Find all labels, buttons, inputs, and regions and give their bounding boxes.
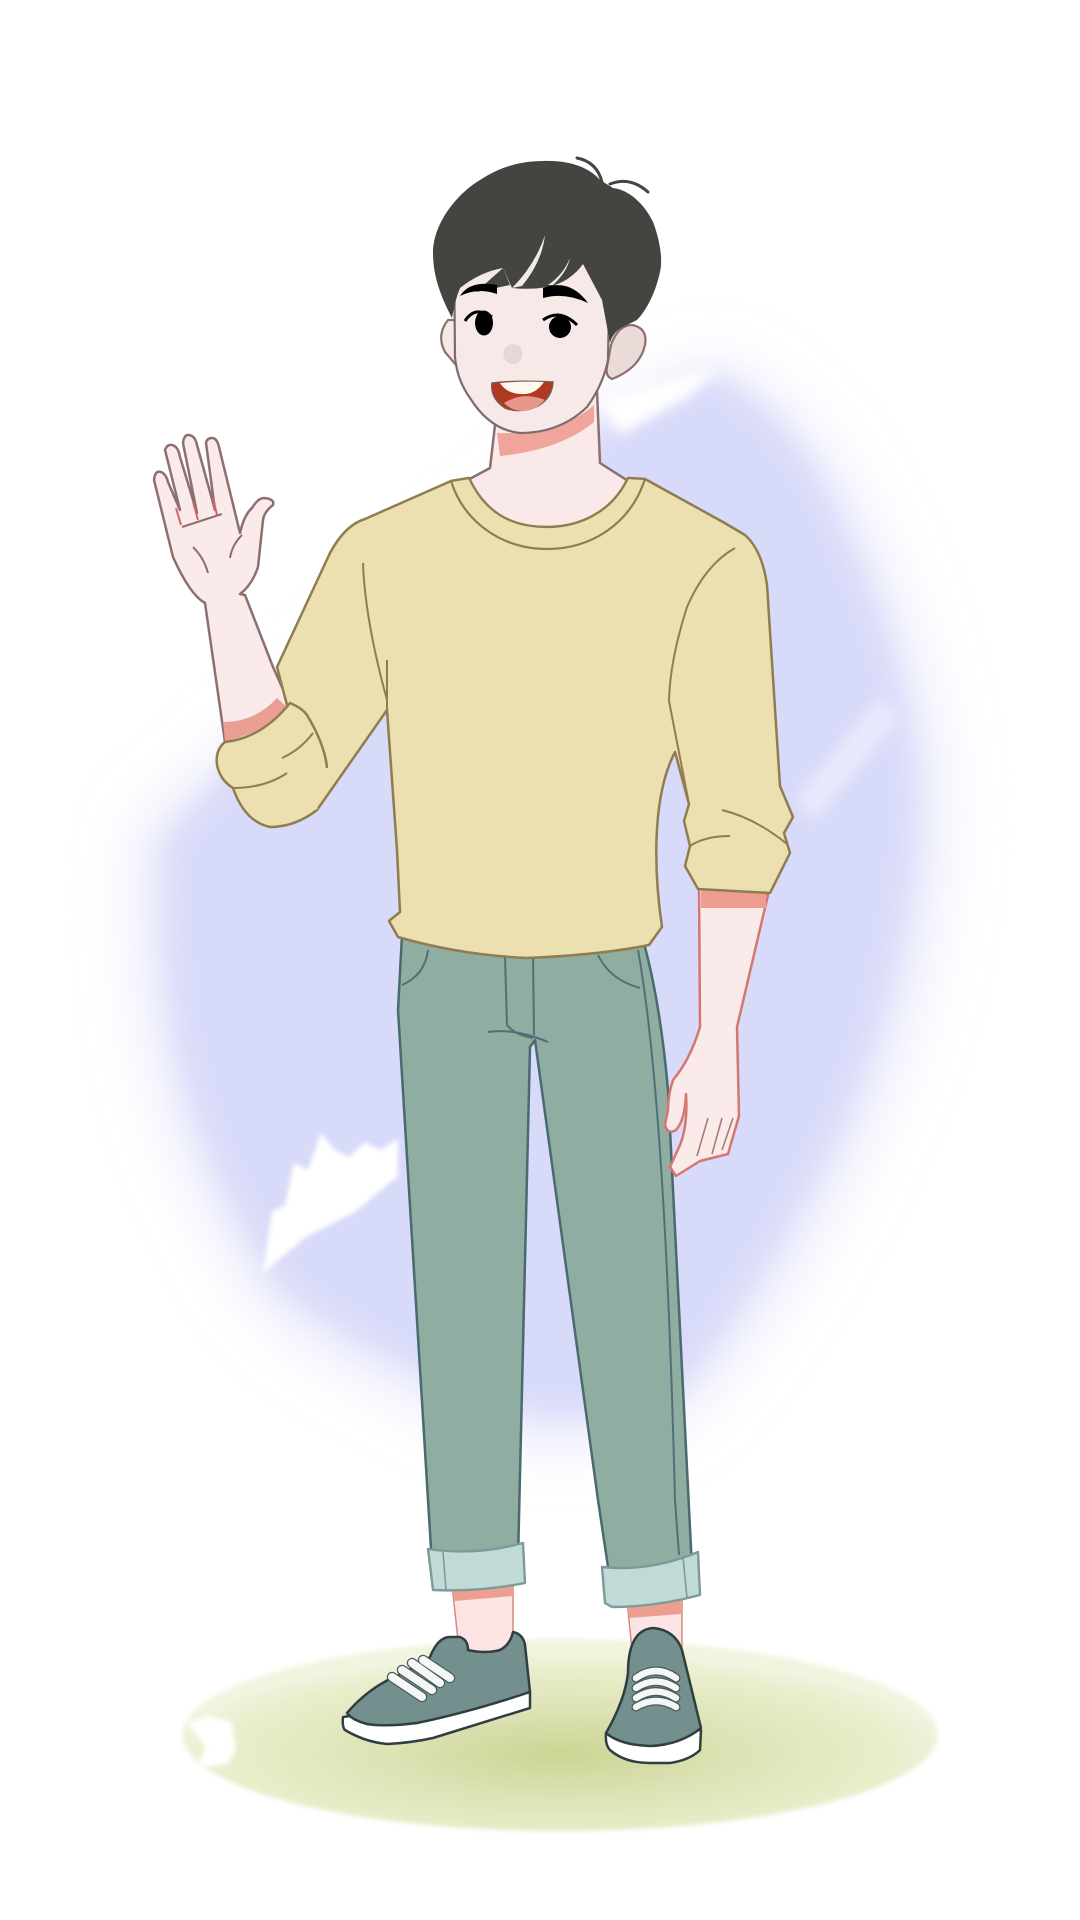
left eyebrow (460, 284, 497, 296)
left eye (475, 310, 493, 336)
trouser seams and pockets (402, 950, 679, 1555)
face (454, 250, 610, 433)
right eye (549, 316, 571, 338)
right ankle (627, 1598, 682, 1650)
wrist shadow (701, 888, 766, 908)
left ear (441, 320, 456, 365)
right eyebrow (543, 285, 588, 303)
white brush patch in the wash (263, 1133, 398, 1273)
background: lavender watercolor wash (139, 365, 940, 1442)
hair strand on forehead (476, 268, 510, 292)
sweater body and sleeves (277, 478, 793, 958)
palm lines (182, 514, 242, 573)
background: green ground patch (182, 1639, 938, 1831)
right trouser cuff (602, 1552, 700, 1607)
hair (433, 161, 661, 343)
left sleeve outline (217, 703, 327, 827)
left raised arm and hand (154, 435, 290, 742)
left shoe (343, 1632, 530, 1744)
mouth (492, 381, 553, 411)
sweater (217, 478, 793, 958)
hair wisps (577, 158, 648, 192)
neck shadow (497, 405, 594, 456)
shoelaces (392, 1660, 450, 1697)
trousers (398, 935, 692, 1580)
teeth (500, 382, 544, 394)
fringe highlights (512, 235, 545, 288)
shoelaces (636, 1671, 676, 1707)
head (433, 158, 661, 433)
right lowered arm and hand (665, 885, 768, 1176)
wrist shadow (223, 698, 288, 741)
sleeve folds (233, 548, 787, 846)
nose (504, 344, 522, 364)
left ankle (452, 1580, 513, 1665)
tongue (504, 396, 545, 411)
sweater collar (451, 478, 645, 549)
right shoe (606, 1628, 701, 1763)
neck (440, 390, 650, 540)
left trouser cuff (428, 1543, 525, 1590)
right ear (607, 325, 645, 379)
rolled left sleeve (217, 704, 327, 827)
